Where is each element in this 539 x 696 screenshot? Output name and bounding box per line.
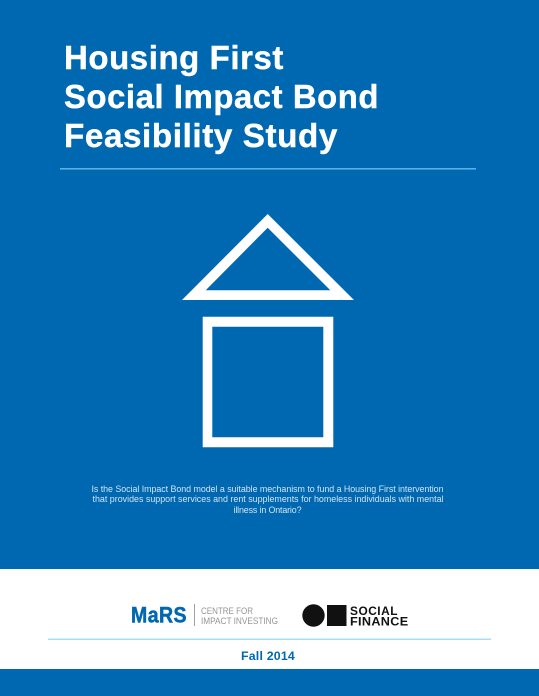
title: Social Impact Bond — [64, 78, 379, 115]
title — [64, 39, 379, 154]
house body — [203, 317, 333, 447]
logo: MaRS Centre for Impact Investing: CENTRE FOR — [201, 606, 253, 617]
footer panel — [0, 569, 539, 669]
description text: that provides support services and rent supplements for homeless individuals with mental — [92, 494, 444, 504]
title: Feasibility Study — [64, 117, 338, 154]
house roof — [182, 214, 354, 300]
icon: house — [182, 214, 354, 447]
date: Fall 2014 — [241, 649, 295, 663]
title: Housing First — [64, 39, 284, 76]
logo: Social Finance — [302, 604, 409, 628]
description text: illness in Ontario? — [234, 505, 302, 515]
description text — [92, 484, 444, 515]
logo: Social Finance: FINANCE — [350, 616, 409, 628]
logo: MaRS Centre for Impact Investing — [131, 602, 278, 628]
description text: Is the Social Impact Bond model a suitable mechanism to fund a Housing First intervention — [92, 484, 444, 494]
logo: Social Finance: SOCIAL — [350, 606, 398, 618]
logo: MaRS Centre for Impact Investing: MaRS — [131, 602, 187, 628]
logo: MaRS Centre for Impact Investing: IMPACT INVESTING — [201, 616, 278, 627]
